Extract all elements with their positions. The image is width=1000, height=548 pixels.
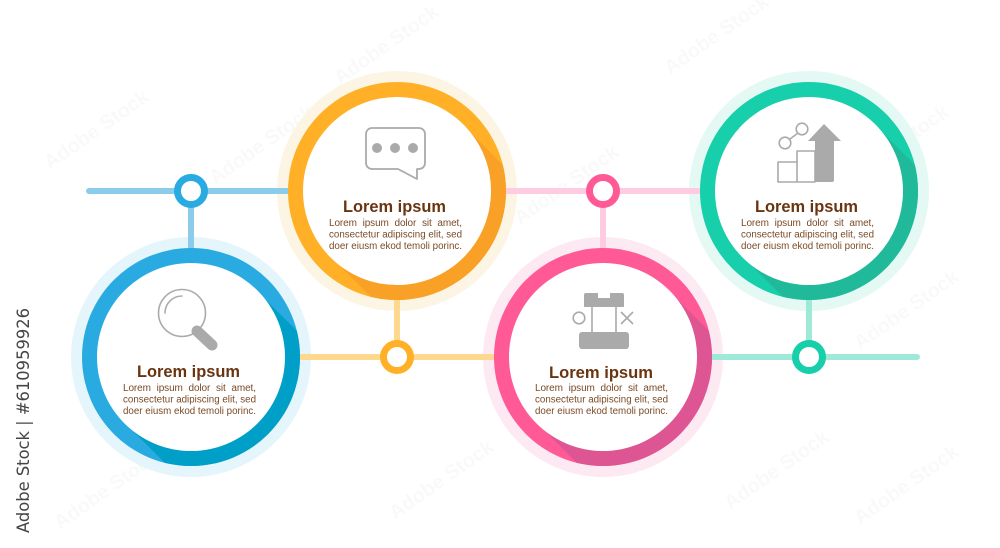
node: orange	[384, 344, 410, 370]
connector: pink	[504, 191, 702, 250]
text: blue step	[123, 383, 256, 417]
node: blue	[178, 178, 204, 204]
panel: blue step	[82, 248, 300, 466]
text: pink step	[535, 383, 668, 417]
text: orange step: Lorem ipsum dolor sit amet,	[329, 218, 462, 229]
heading: green step: Lorem ipsum	[755, 197, 858, 216]
heading: orange step: Lorem ipsum	[343, 197, 446, 216]
text: blue step: consectetur adipiscing elit, sed	[123, 394, 256, 406]
text: orange step: consectetur adipiscing elit, sed	[329, 230, 462, 240]
icon: speech bubble	[366, 128, 425, 179]
text: blue step: doer eiusm ekod temoli porinc.	[123, 406, 256, 417]
text: pink step: consectetur adipiscing elit, sed	[535, 394, 668, 406]
connector: green	[710, 297, 917, 357]
panel: pink step	[494, 248, 712, 466]
text: green step: consectetur adipiscing elit, sed	[741, 230, 874, 240]
text: pink step: Lorem ipsum dolor sit amet,	[535, 383, 668, 394]
connector: orange	[298, 297, 496, 357]
connector: blue	[89, 191, 292, 250]
node: pink	[590, 178, 616, 204]
heading: blue step: Lorem ipsum	[137, 362, 240, 381]
text: green step: Lorem ipsum dolor sit amet,	[741, 218, 874, 229]
text: orange step	[329, 218, 462, 252]
panel: green step	[700, 82, 918, 300]
text: blue step: Lorem ipsum dolor sit amet,	[123, 383, 256, 394]
text: green step: doer eiusm ekod temoli porinc.	[741, 241, 874, 252]
stock image credit: Adobe Stock | #610959926	[14, 308, 34, 533]
icon: strategy tower	[573, 293, 633, 349]
halos behind the step circles	[71, 71, 929, 477]
icon: growth chart with arrow	[778, 123, 841, 182]
panel: orange step	[288, 82, 506, 300]
text: orange step: doer eiusm ekod temoli porinc.	[329, 241, 462, 252]
text: green step	[741, 218, 874, 252]
icon: magnifying glass	[158, 290, 212, 345]
heading: pink step: Lorem ipsum	[549, 363, 653, 382]
text: pink step: doer eiusm ekod temoli porinc.	[535, 406, 668, 417]
node: green	[796, 344, 822, 370]
